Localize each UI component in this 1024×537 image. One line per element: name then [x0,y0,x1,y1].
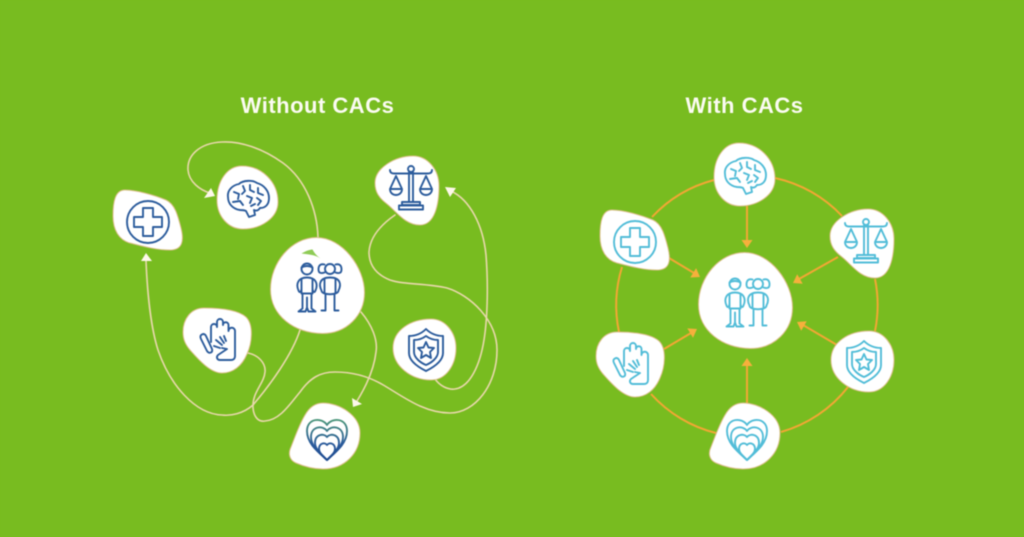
arrow: hand to children [664,328,697,349]
node: brain [217,166,278,229]
node: heart [709,403,780,469]
node: hand [596,332,664,397]
node: children [698,252,792,348]
arrow: children to heart [352,312,376,407]
arrow: hand to scale winding path [248,215,497,421]
arrow: scale to children [793,257,838,284]
node: medical cross [600,210,669,270]
arrow: children to brain [188,142,318,237]
arrow: children to plus [141,253,300,415]
node: scales of justice [375,156,439,225]
node: shield [393,319,456,380]
node: heart [289,403,360,469]
arrow: brain to children [742,206,752,248]
arrow: shield to scale [435,187,487,389]
heading: With CACs: With CACs [686,93,803,118]
arrow: heart to children [742,358,752,404]
node: brain [714,143,775,206]
arrow: shield to children [797,321,837,345]
node: hand [183,308,251,373]
heading: Without CACs: Without CACs [241,93,394,118]
panel: without CACs [113,93,497,469]
panel: with CACs [596,93,894,469]
node: shield [831,331,894,392]
node: medical cross [113,190,182,250]
ring: connecting arcs [616,178,878,433]
arrow: plus to children [669,258,700,278]
node: children [270,238,364,334]
node: scales of justice [830,209,894,278]
